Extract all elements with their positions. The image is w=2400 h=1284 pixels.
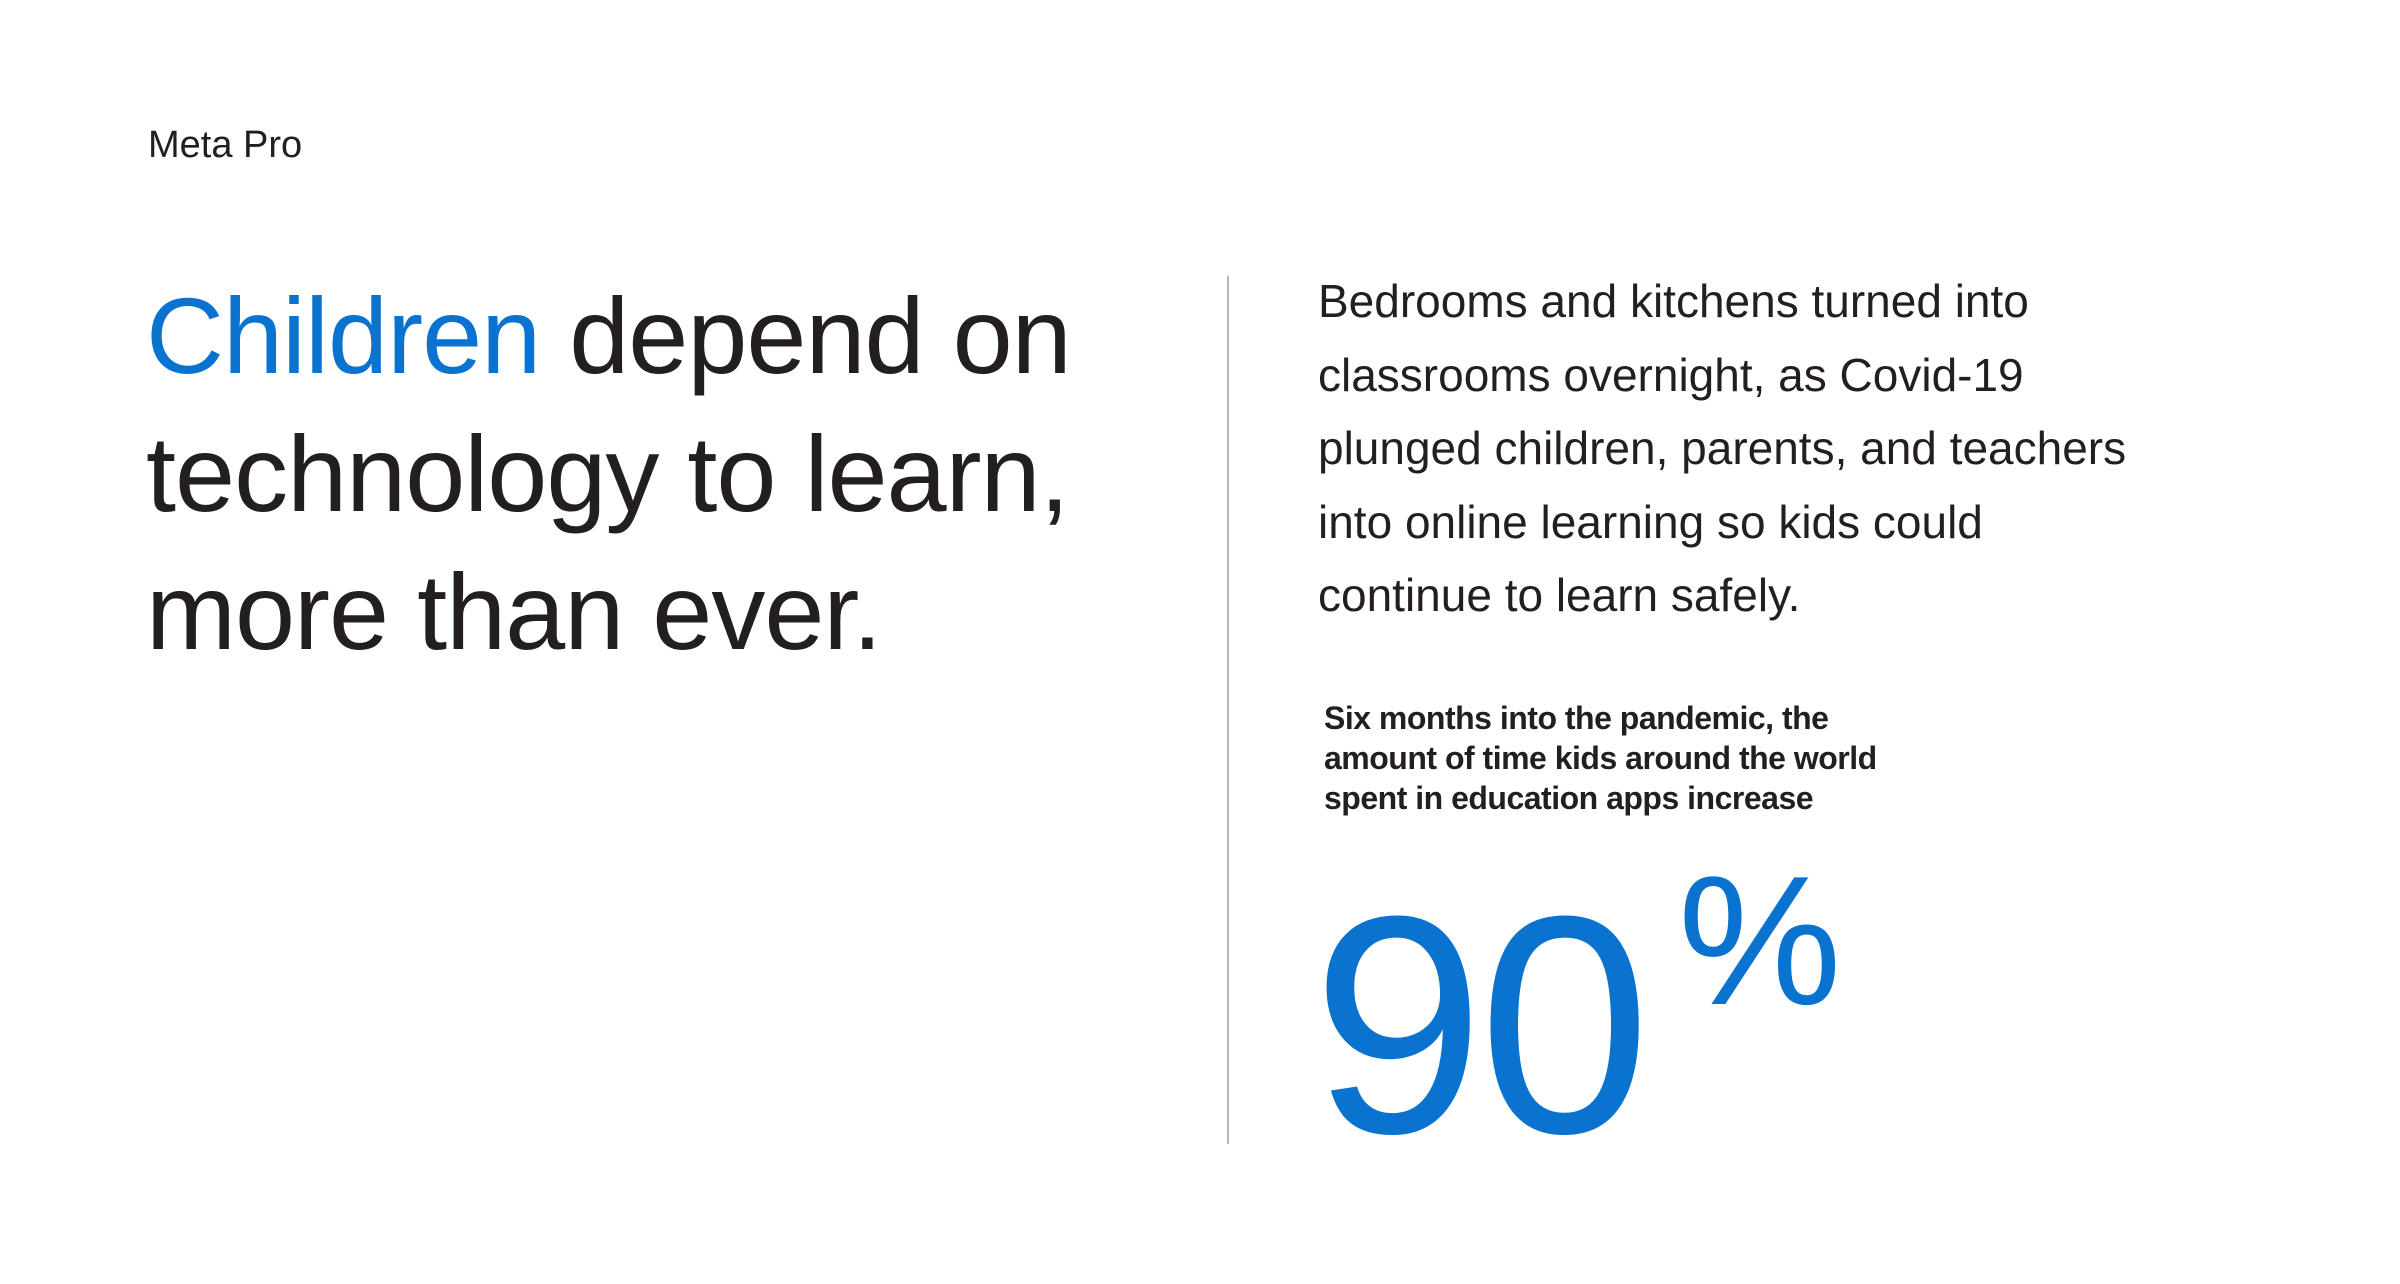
paragraph: into online learning so kids could bbox=[1318, 496, 1983, 548]
heading: technology to learn, bbox=[146, 413, 1069, 534]
stat: 90% bbox=[1312, 837, 1842, 1198]
paragraph: continue to learn safely. bbox=[1318, 569, 1800, 621]
divider bbox=[1227, 276, 1229, 1144]
heading: Children depend on bbox=[146, 275, 1071, 396]
heading bbox=[146, 275, 1071, 672]
stat caption bbox=[1324, 700, 1877, 816]
stat caption: amount of time kids around the world bbox=[1324, 740, 1877, 776]
paragraph: classrooms overnight, as Covid-19 bbox=[1318, 348, 2024, 400]
label: Meta Pro: Meta Pro bbox=[148, 124, 302, 166]
paragraph bbox=[1318, 275, 2126, 621]
paragraph: Bedrooms and kitchens turned into bbox=[1318, 275, 2029, 327]
stat caption: Six months into the pandemic, the bbox=[1324, 700, 1828, 736]
heading: more than ever. bbox=[146, 551, 881, 672]
percent sign: % bbox=[1678, 837, 1842, 1043]
stat caption: spent in education apps increase bbox=[1324, 780, 1813, 816]
paragraph: plunged children, parents, and teachers bbox=[1318, 422, 2126, 474]
number 90: 90 bbox=[1312, 851, 1645, 1198]
